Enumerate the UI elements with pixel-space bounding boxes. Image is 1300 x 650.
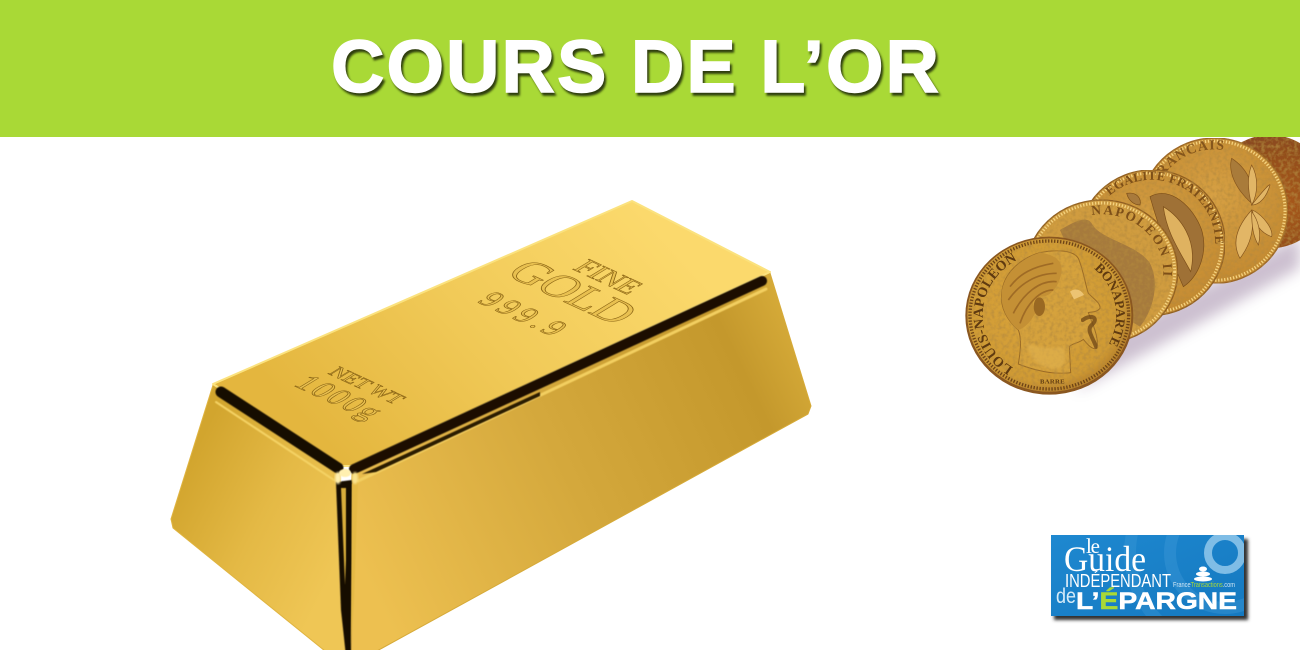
coin 4 [1152,138,1288,284]
coin 1 portrait coin [965,236,1134,395]
logo: guide independant de l'epargne [1051,535,1251,623]
gold coins [965,137,1300,395]
bar left face [171,385,346,650]
coin 3 legend: EGALITE FRATERNITE [1104,172,1224,244]
engraving: fine gold [286,253,651,425]
ear [1034,297,1045,316]
top edge dark reflection right [354,281,766,481]
logo text: l'epargne: L’ÉPARGNE [1076,587,1237,615]
logo text: francetransactions: FranceTransactions.com [1173,582,1235,589]
engraving: net weight: 1000g [286,371,393,425]
moustache and goatee [1083,317,1096,347]
logo icon: stacked stones [1194,566,1212,582]
top edge dark reflection left [216,392,338,480]
coin legends: LOUIS-NAPOLEON [974,252,1016,376]
coin 2 [1034,200,1178,339]
logo shadow [1054,539,1248,620]
logo text: le guide: Guide [1064,539,1146,579]
logo text: independant: INDÉPENDANT [1065,571,1171,591]
eye [1070,289,1084,299]
engraving: fine gold: 999.9 [470,287,579,342]
engraving: net weight: NET WT [323,364,410,407]
coin 5 [1241,137,1300,248]
portrait [1001,251,1100,373]
coin legends [974,252,1125,384]
engraving: fine gold: GOLD [496,253,651,331]
coin 2 legend: NAPOLEON III [1091,205,1172,276]
coin shadow [1075,235,1300,392]
neck highlight [1027,343,1065,369]
coin 3 [1092,170,1225,316]
hair [1002,253,1062,330]
laurel wreath [1231,158,1272,258]
title: COURS DE L’OR [331,25,939,108]
coin legends: BARRE [1040,378,1065,385]
coin legends: BONAPARTE [1094,262,1125,347]
logo panel [1051,535,1244,616]
logo text: de: de [1056,585,1076,608]
bust relief [1060,220,1155,327]
front vertical edge reflections [335,469,358,650]
header banner [0,0,1300,137]
title: COURS DE L’OR [333,28,941,111]
engraving: fine gold: FINE [566,256,650,299]
logo text: le guide: le [1086,534,1100,558]
coin 4 legend: FRANCAIS [1156,140,1224,171]
gold bar [171,201,811,650]
bar top face [213,201,770,466]
laurel branch [1127,193,1204,287]
bar right face [346,273,811,650]
logo ring [1208,536,1242,570]
